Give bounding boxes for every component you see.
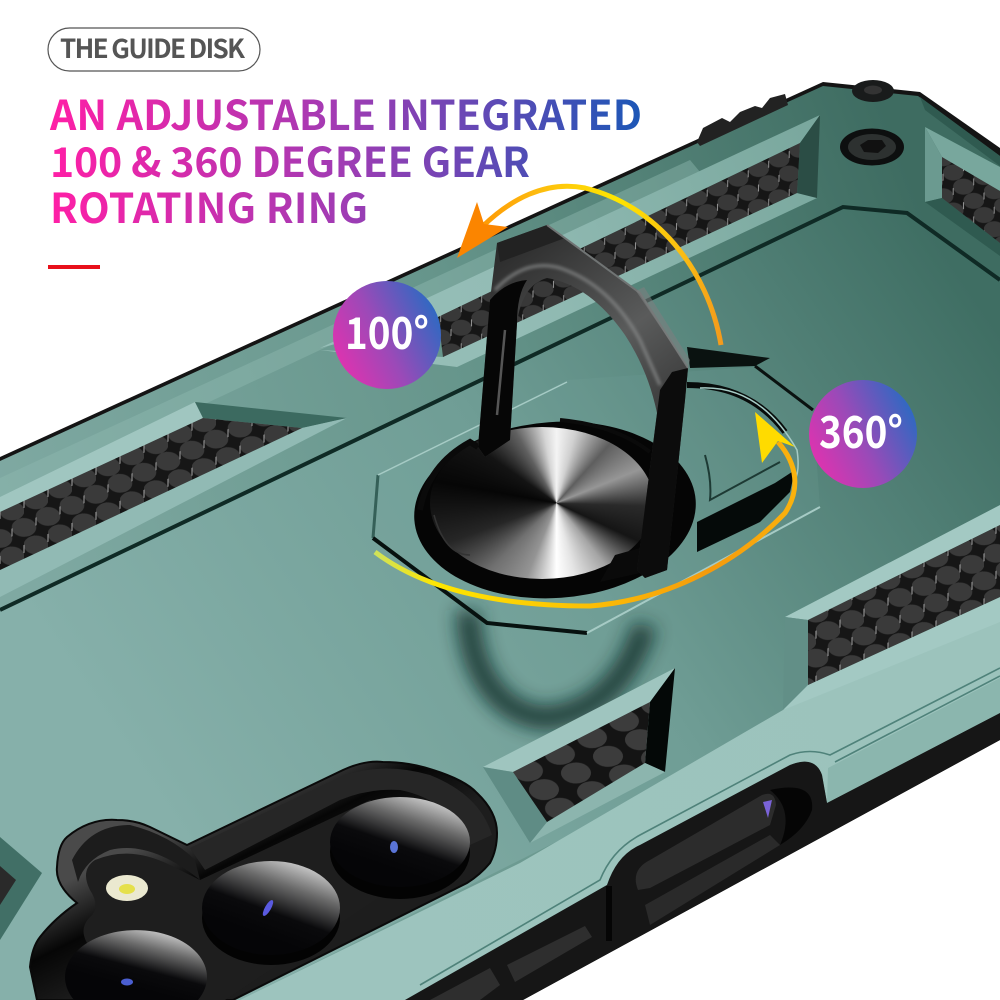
panel recess line [0,207,1000,610]
lens: left [65,930,207,1000]
badge: 360 degrees: 360° [819,397,903,461]
metal ring handle [478,225,690,578]
grip: top long [320,115,820,367]
grip: lower [483,668,675,843]
ring mount plate [373,347,820,633]
title: AN ADJUSTABLE INTEGRATED [49,82,642,142]
flash [106,875,148,901]
title [49,82,642,235]
small left grip corner [0,837,42,940]
title: ROTATING RING [50,175,368,235]
grip: top right [925,127,1000,256]
top edge buttons [697,94,788,146]
title: 100 & 360 DEGREE GEAR [50,129,530,189]
disc notches [420,420,650,582]
lower lip of case [240,600,1000,1000]
camera island [30,762,497,1000]
badge: 100 degrees [333,281,441,389]
badge: 360 degrees [809,380,917,488]
lip detail lines [420,668,1000,990]
badge: 100 degrees: 100° [345,298,429,362]
lens: right [330,797,470,899]
main back panel [0,207,1000,1000]
metallic disc [430,427,654,579]
grip: left [0,402,347,597]
arrow: 100 degree rotation [457,186,721,345]
red accent line [48,265,100,269]
soft ring shadow [468,610,645,718]
side panel [827,678,1000,803]
arrow: 360 degree rotation [375,412,795,606]
grip: right [783,505,1000,710]
back corner screw [840,128,904,166]
ring disc base [408,412,702,608]
side button recess [405,713,1000,1000]
tag: THE GUIDE DISK: THE GUIDE DISK [60,29,245,66]
lens: middle [202,861,340,965]
ring slot [687,385,798,552]
top corner screw [852,80,894,102]
